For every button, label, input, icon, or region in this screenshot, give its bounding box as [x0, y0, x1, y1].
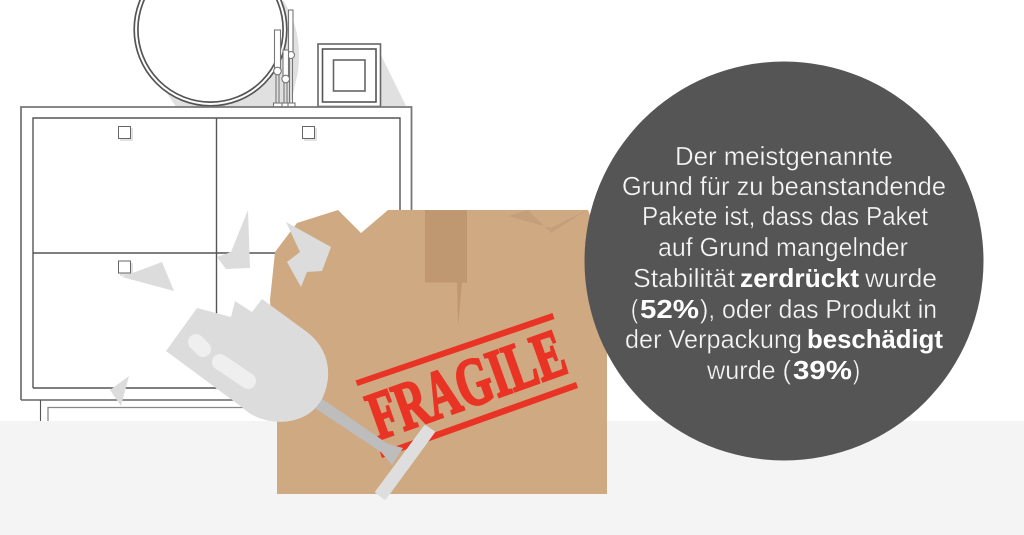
glass stem [310, 396, 403, 465]
callout text: Der meistgenannte [675, 141, 893, 171]
callout circle [584, 62, 984, 460]
broken glass [166, 299, 434, 499]
floor [0, 421, 1024, 535]
glass bowl [166, 299, 328, 422]
candlesticks [274, 10, 295, 107]
callout text: ), oder das Produkt in [700, 294, 937, 324]
callout text: Grund für zu beanstandende [622, 171, 946, 201]
callout text: Stabilität [633, 263, 736, 293]
callout text: ( [631, 294, 638, 324]
callout text: 39% [793, 355, 852, 385]
callout text: ) [853, 355, 860, 385]
knob: top right [302, 126, 317, 141]
callout text: auf Grund mangelnder [658, 232, 908, 262]
stamp word: FRAGILE [358, 314, 575, 454]
picture frame [318, 44, 406, 106]
knob: top left [118, 126, 133, 141]
packing tape [425, 210, 467, 282]
glass foot [376, 426, 434, 499]
callout text: der Verpackung [625, 324, 802, 354]
flap crease [508, 210, 587, 233]
callout text [622, 141, 946, 385]
callout text: beschädigt [807, 324, 943, 354]
callout text: wurde [864, 263, 937, 293]
highlights [196, 342, 248, 381]
cabinet [21, 107, 412, 421]
stamp bottom rule [380, 382, 578, 458]
glass shards [110, 210, 331, 406]
stamp top rule [356, 313, 554, 386]
cardboard box [270, 210, 607, 494]
FRAGILE stamp [356, 313, 578, 458]
mirror [134, 0, 299, 107]
callout text: zerdrückt [740, 263, 859, 293]
knob: bottom left [118, 261, 133, 276]
callout text: Pakete ist, dass das Paket [642, 201, 929, 231]
tape tear [457, 282, 462, 327]
callout text: wurde ( [706, 355, 791, 385]
callout text: 52% [640, 294, 699, 324]
